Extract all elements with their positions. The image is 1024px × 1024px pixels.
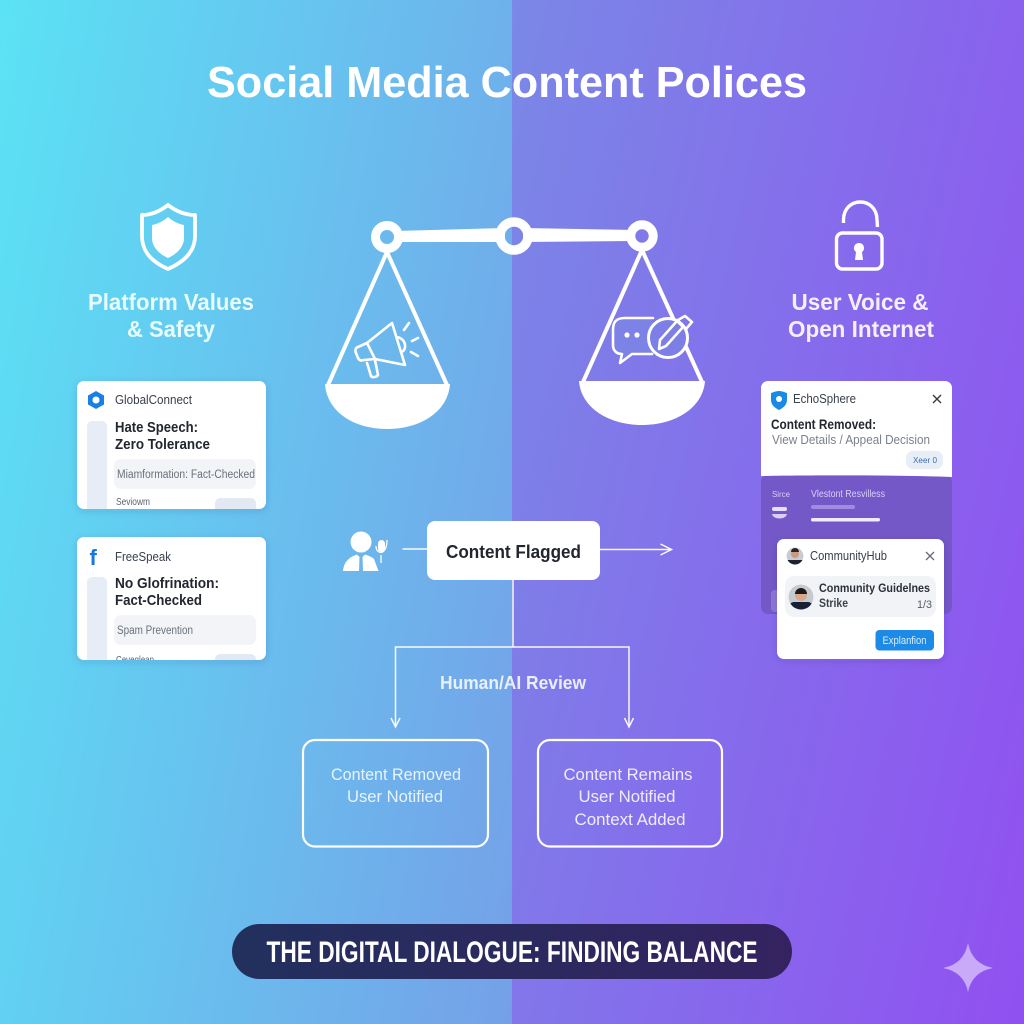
- box: Content Removed: [303, 740, 488, 846]
- strike text: Strike: [819, 596, 848, 610]
- right pan: [579, 250, 705, 425]
- banner: The Digital Dialogue: THE DIGITAL DIALOGUE: FINDING BALANCE: [266, 936, 758, 969]
- box: Content Remains: Content Remains: [564, 766, 692, 784]
- button: Explanation: Explanfion: [882, 635, 926, 647]
- white header panel: [761, 381, 952, 477]
- balance scale: [325, 222, 705, 429]
- icon: chat and pencil: [613, 316, 692, 363]
- heading: Platform Values & Safety: [88, 289, 254, 342]
- policy row: [114, 459, 256, 489]
- heading: User Voice & Open Internet: [788, 289, 934, 342]
- box: Content Flagged: [427, 521, 600, 580]
- icon: shield: [142, 205, 195, 269]
- section label: Ceveglean: [116, 654, 154, 666]
- label: Human/AI Review: Human/AI Review: [440, 673, 587, 693]
- small avatar: [786, 548, 804, 566]
- left pan: [325, 252, 450, 429]
- card heading: Zero Tolerance: [115, 436, 210, 453]
- strike text: Conmunity Guidelnes: [819, 581, 930, 595]
- strike row: [785, 576, 936, 617]
- heading: User Voice & Open Internet: User Voice &: [792, 289, 928, 315]
- card name: FreeSpeak: [115, 550, 172, 564]
- strike text: 1/3: [917, 599, 932, 611]
- icon: person with microphone: [343, 532, 387, 571]
- box: Content Flagged: Content Flagged: [446, 541, 581, 562]
- card: FreeSpeak: [77, 537, 266, 677]
- heading: User Voice & Open Internet: Open Internet: [788, 316, 934, 342]
- logo: GlobalConnect: [88, 391, 104, 409]
- scale beam: [395, 228, 635, 242]
- card name: CommunityHub: [810, 549, 887, 563]
- purple panel: Vlestont Resvilless: [811, 488, 885, 500]
- arrow: flagged to right: [600, 544, 672, 555]
- large avatar: [788, 584, 814, 612]
- sidebar: [87, 577, 107, 660]
- background left half: [0, 0, 512, 1024]
- banner: The Digital Dialogue: [232, 924, 792, 979]
- badge: [906, 451, 943, 469]
- sidebar: [87, 421, 107, 509]
- box: Content Remains: Context Added: [574, 811, 686, 829]
- scale left pivot: [376, 226, 398, 248]
- connector: from person: [402, 548, 427, 550]
- icon: megaphone: [355, 323, 418, 377]
- card heading: [115, 419, 210, 453]
- card: GlobalConnect: [77, 381, 266, 522]
- connector tree: [391, 580, 634, 727]
- strike text: [819, 581, 932, 611]
- icon: sparkle: [943, 943, 993, 992]
- card row text: Spam Prevention: [117, 625, 193, 637]
- purple panel: Sirce: [772, 490, 791, 499]
- icon: padlock: [836, 202, 882, 269]
- card subtext: View Details / Appeal Decision: [772, 432, 930, 447]
- logo: EchoSphere: [771, 391, 787, 410]
- icon: close: [933, 395, 941, 403]
- box: Content Removed: User Notified: [347, 788, 443, 806]
- button placeholder: [215, 498, 256, 509]
- box: Content Remains: User Notified: [578, 788, 676, 806]
- section label: Seviowm: [116, 496, 150, 508]
- background right half: [512, 0, 1024, 1024]
- card heading: [115, 575, 219, 609]
- card name: EchoSphere: [793, 392, 856, 406]
- card heading: Hate Speech:: [115, 419, 198, 436]
- button placeholder: [215, 654, 256, 660]
- logo: FreeSpeak: f: [90, 545, 98, 570]
- box: Content Removed: Content Removed: [331, 766, 461, 784]
- policy row: [114, 615, 256, 645]
- button: Explanation: [876, 630, 934, 650]
- card name: GlobalConnect: [115, 393, 192, 407]
- badge: Xeer 0: [913, 456, 938, 465]
- icon: close: [926, 552, 934, 560]
- scale centre pivot: [500, 222, 528, 250]
- title: Social Media Content Polices: [207, 58, 807, 107]
- card heading: Content Removed:: [771, 416, 876, 432]
- heading: Platform Values & Safety: & Safety: [127, 316, 215, 342]
- heading: Platform Values & Safety: Platform Values: [88, 289, 254, 315]
- purple panel: [761, 475, 952, 614]
- card row text: Miamformation: Fact-Checked: [117, 469, 255, 481]
- card heading: No Glofrination:: [115, 575, 219, 592]
- box: Content Remains: [538, 740, 722, 846]
- card heading: Fact-Checked: [115, 592, 202, 609]
- card: EchoSphere: [761, 381, 952, 614]
- scale right pivot: [631, 225, 653, 247]
- card: CommunityHub: [777, 539, 944, 659]
